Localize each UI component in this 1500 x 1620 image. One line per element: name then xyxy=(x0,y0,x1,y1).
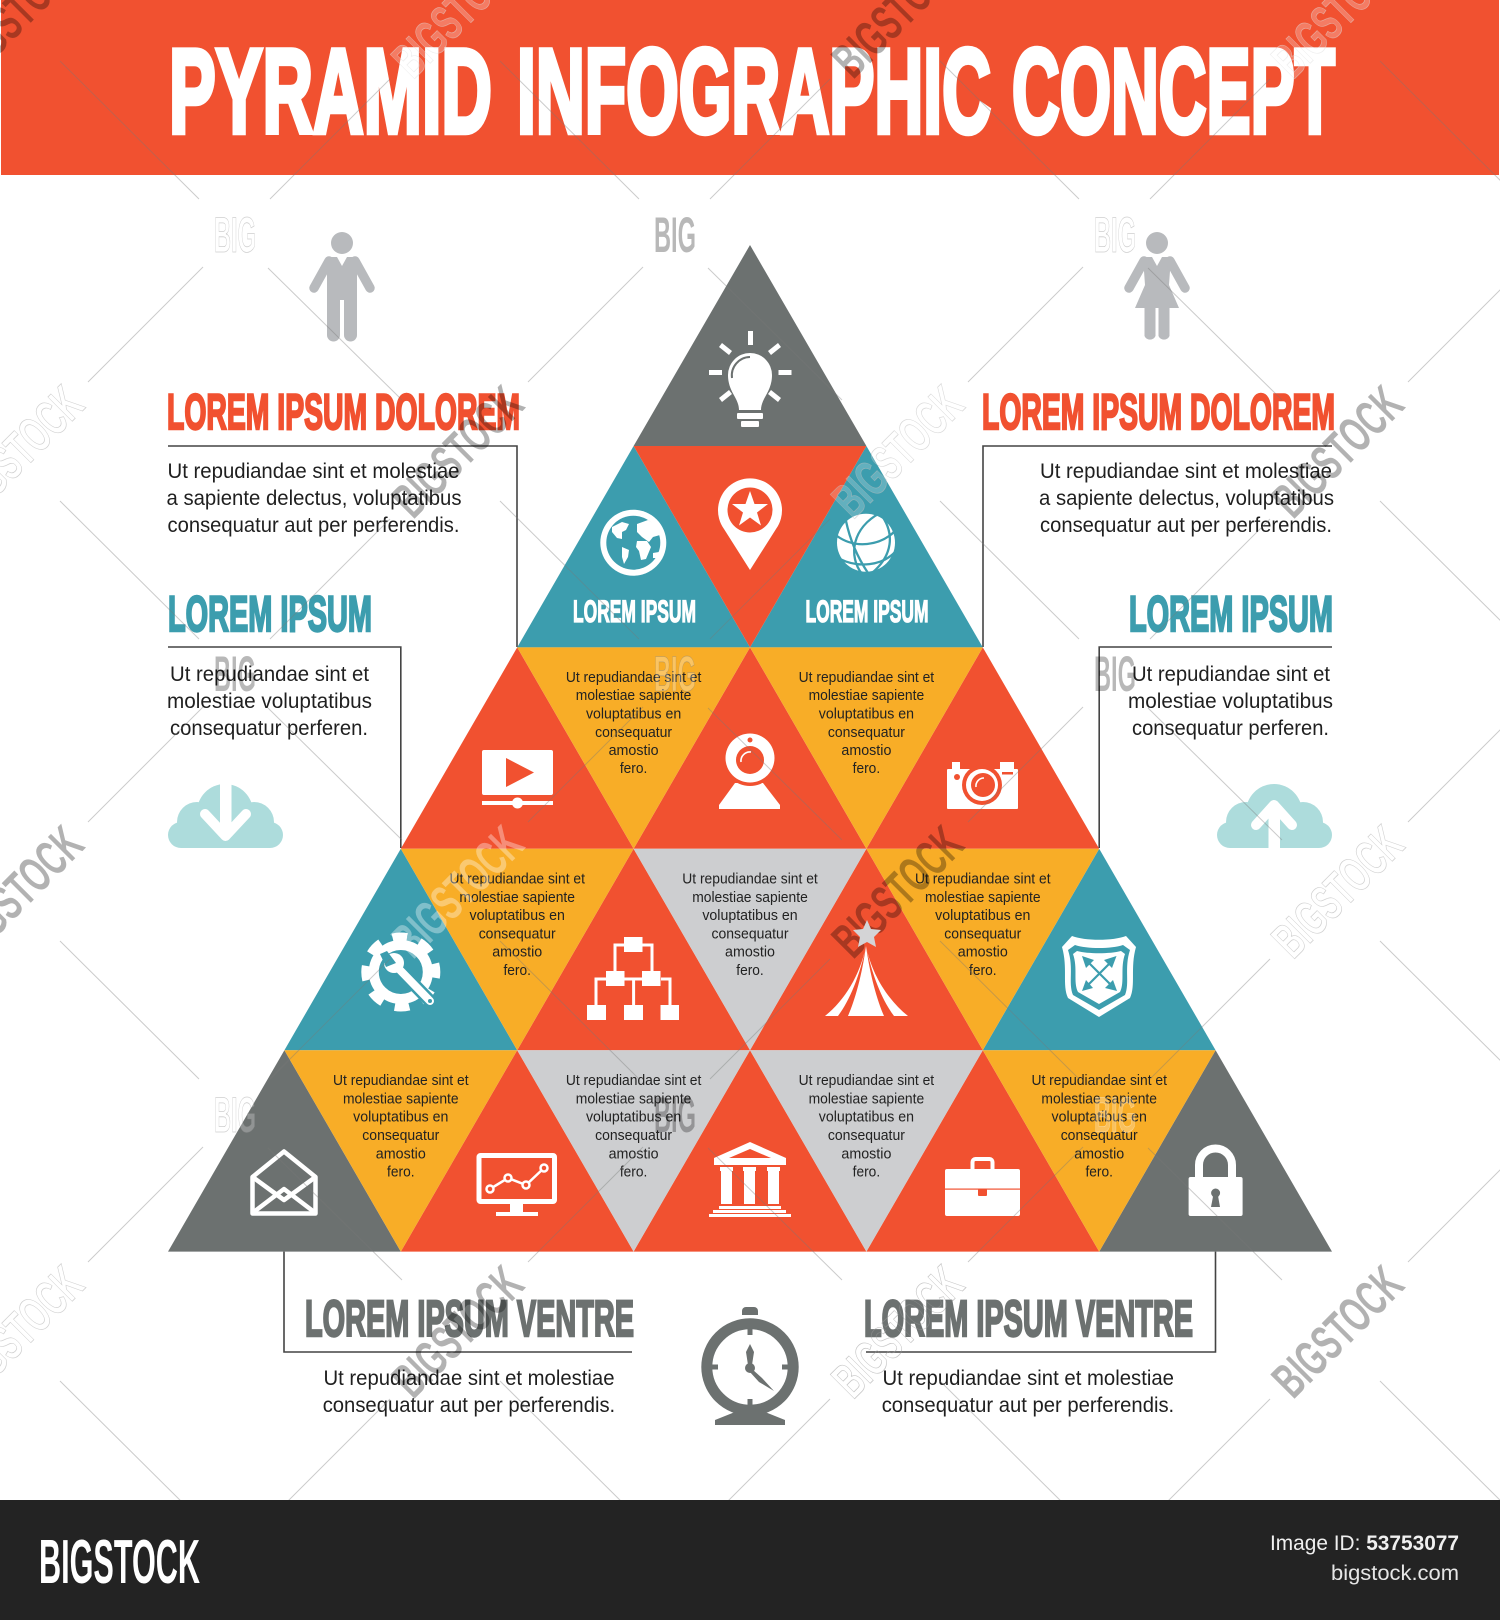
icon: gear with wrench xyxy=(358,930,443,1014)
triangle text: row 3 left: Ut repudiandae sint et xyxy=(566,670,701,686)
right middle heading: LOREM IPSUM xyxy=(1129,586,1333,642)
row 2 triangles xyxy=(517,446,983,647)
icon: wire globe xyxy=(837,513,895,574)
row 5 triangles xyxy=(168,1050,1332,1252)
triangle text: row 4 centre: fero. xyxy=(736,963,764,979)
triangle text: row 4 right: Ut repudiandae sint et xyxy=(915,872,1051,888)
triangle text: row 4 right: molestiae sapiente xyxy=(925,890,1041,906)
left top text: Ut repudiandae sint et molestiae xyxy=(168,460,460,483)
left top connector xyxy=(168,446,517,647)
watermark: BIG marks: BIG xyxy=(214,646,256,702)
left middle connector xyxy=(168,647,401,848)
triangle text: row 5 first: amostio xyxy=(376,1146,426,1162)
triangle text: row 3 left xyxy=(566,670,701,777)
bottom right text xyxy=(882,1367,1174,1417)
triangle text: row 5 third: amostio xyxy=(841,1146,891,1162)
triangle text: row 4 left: amostio xyxy=(492,945,542,961)
text: BIG xyxy=(1094,207,1136,263)
triangle text: row 5 fourth: molestiae sapiente xyxy=(1041,1091,1157,1107)
triangle text: row 4 left: Ut repudiandae sint et xyxy=(449,872,585,888)
watermark: BIG marks xyxy=(214,207,1136,1143)
icon: envelope xyxy=(252,1152,316,1214)
watermark: BIGSTOCK marks: BIGSTOCK xyxy=(821,375,974,528)
triangle text: row 3 right: amostio xyxy=(841,743,891,759)
title banner xyxy=(1,0,1499,175)
triangle text: row 5 second: Ut repudiandae sint et xyxy=(566,1073,701,1089)
icon: monitor chart xyxy=(479,1156,554,1216)
watermark: BIG marks: BIG xyxy=(654,646,696,702)
triangle text: row 4 centre: Ut repudiandae sint et xyxy=(682,872,818,888)
bottom left connector xyxy=(284,1252,632,1352)
triangle text: row 4 right: amostio xyxy=(958,945,1008,961)
triangle text: row 5 first: molestiae sapiente xyxy=(343,1091,459,1107)
row 4 triangles xyxy=(284,849,1216,1050)
triangle text: row 4 centre: amostio xyxy=(725,945,775,961)
triangle text: row 5 third: molestiae sapiente xyxy=(809,1091,924,1107)
triangle text: row 5 second: molestiae sapiente xyxy=(576,1091,691,1107)
footer bar xyxy=(0,1500,1500,1620)
bottom left text xyxy=(323,1367,615,1417)
triangle text: row 3 right xyxy=(799,670,934,777)
right top text xyxy=(1039,460,1334,537)
watermark: BIGSTOCK marks: BIGSTOCK xyxy=(1261,1255,1414,1408)
title xyxy=(169,24,1335,158)
watermark: BIGSTOCK marks: BIGSTOCK xyxy=(381,815,534,968)
triangle text: row 5 first: Ut repudiandae sint et xyxy=(333,1073,469,1089)
triangle text: row 3 left: consequatur xyxy=(595,725,672,741)
icon: map pin xyxy=(718,478,782,570)
triangle text: row 4 left: consequatur xyxy=(479,926,556,942)
triangle text: row 5 third xyxy=(799,1073,934,1181)
triangle text: row 4 right xyxy=(915,872,1051,979)
icon: light bulb xyxy=(709,331,792,427)
icon: cloud upload xyxy=(1217,784,1332,848)
triangle text: row 5 first: fero. xyxy=(387,1165,415,1181)
right middle text: molestiae voluptatibus xyxy=(1128,690,1333,713)
triangle text: row 5 second: amostio xyxy=(609,1146,659,1162)
left middle text: Ut repudiandae sint et xyxy=(170,663,369,686)
triangle text: row 3 right: voluptatibus en xyxy=(819,706,914,722)
bottom left text: consequatur aut per perferendis. xyxy=(323,1394,615,1417)
triangle text: row 4 centre: voluptatibus en xyxy=(702,908,798,924)
triangle text: row 5 first: consequatur xyxy=(362,1128,439,1144)
right middle connector xyxy=(1099,647,1332,848)
triangle text: row 5 second: voluptatibus en xyxy=(586,1110,681,1126)
triangle text: row 5 fourth: consequatur xyxy=(1061,1128,1138,1144)
row 1 triangle xyxy=(634,245,866,446)
bottom right connector xyxy=(866,1252,1216,1352)
triangle text: row 4 centre: consequatur xyxy=(712,926,789,942)
left top heading: LOREM IPSUM DOLOREM xyxy=(167,384,520,440)
triangle text: row 5 fourth xyxy=(1031,1073,1167,1181)
label: right: LOREM IPSUM xyxy=(806,593,928,629)
triangle text: row 3 left: voluptatibus en xyxy=(586,706,681,722)
pyramid xyxy=(168,245,1332,1252)
triangle text: row 4 right: consequatur xyxy=(944,926,1021,942)
icon: woman xyxy=(1129,232,1185,340)
triangle text: row 3 right: fero. xyxy=(853,761,880,777)
triangle text: row 4 right: fero. xyxy=(969,963,997,979)
left middle text: molestiae voluptatibus xyxy=(167,690,372,713)
icon: cloud download xyxy=(168,784,283,848)
triangle text: row 5 fourth: fero. xyxy=(1085,1165,1113,1181)
triangle text: row 3 right: molestiae sapiente xyxy=(809,688,924,704)
watermark: BIGSTOCK marks: BIGSTOCK xyxy=(381,375,534,528)
triangle text: row 3 left: amostio xyxy=(609,743,659,759)
triangle text: row 4 left: voluptatibus en xyxy=(470,908,565,924)
icon: briefcase xyxy=(945,1159,1020,1216)
right top text: Ut repudiandae sint et molestiae xyxy=(1040,460,1332,483)
icon: video player xyxy=(482,750,553,808)
footer image id: Image ID: 53753077 xyxy=(1270,1532,1459,1555)
icon: shield with arrows xyxy=(1062,936,1136,1017)
right middle text: Ut repudiandae sint et xyxy=(1132,663,1330,686)
left middle heading: LOREM IPSUM xyxy=(168,586,372,642)
left top text: a sapiente delectus, voluptatibus xyxy=(166,487,462,510)
triangle text: row 5 third: Ut repudiandae sint et xyxy=(799,1073,934,1089)
icon: circus tent xyxy=(825,946,908,1016)
triangle text: row 3 left: fero. xyxy=(620,761,647,777)
icon: padlock xyxy=(1189,1148,1243,1216)
triangle text: row 5 first: voluptatibus en xyxy=(353,1110,448,1126)
title: PYRAMID xyxy=(169,24,492,158)
watermark: BIGSTOCK marks: BIGSTOCK xyxy=(1261,815,1414,968)
footer site: bigstock.com xyxy=(1331,1562,1459,1585)
bottom left text: Ut repudiandae sint et molestiae xyxy=(324,1367,614,1390)
triangle text: row 5 third: consequatur xyxy=(828,1128,905,1144)
title: INFOGRAPHIC xyxy=(517,24,991,158)
right top connector xyxy=(983,446,1332,647)
icon: clock xyxy=(707,1307,793,1425)
footer bar: BIGSTOCK xyxy=(39,1528,200,1597)
icon: world globe xyxy=(600,510,666,576)
watermark: BIGSTOCK marks: BIGSTOCK xyxy=(821,815,974,968)
right middle text: consequatur perferen. xyxy=(1132,717,1329,740)
row 3 triangles xyxy=(401,647,1099,849)
left top text: consequatur aut per perferendis. xyxy=(168,514,460,537)
bottom left heading: LOREM IPSUM VENTRE xyxy=(305,1290,634,1347)
left middle text: consequatur perferen. xyxy=(170,717,368,740)
triangle text: row 3 right: consequatur xyxy=(828,725,905,741)
triangle text: row 3 left: molestiae sapiente xyxy=(576,688,691,704)
watermark: BIGSTOCK marks: BIGSTOCK xyxy=(821,1255,974,1408)
triangle text: row 5 third: voluptatibus en xyxy=(819,1110,914,1126)
left middle text xyxy=(167,663,372,740)
triangle text: row 5 third: fero. xyxy=(853,1165,880,1181)
text: BIG xyxy=(1094,646,1136,702)
triangle text: row 5 fourth: amostio xyxy=(1074,1146,1124,1162)
icon: temple xyxy=(709,1142,791,1217)
watermark: BIG marks: BIG xyxy=(654,207,696,263)
triangle text: row 3 right: Ut repudiandae sint et xyxy=(799,670,934,686)
right top text: a sapiente delectus, voluptatibus xyxy=(1039,487,1334,510)
watermark: BIGSTOCK marks: BIGSTOCK xyxy=(381,1255,534,1408)
text: BIG xyxy=(1094,1087,1136,1143)
triangle text: row 4 centre: molestiae sapiente xyxy=(692,890,808,906)
triangle text: row 4 centre xyxy=(682,872,818,979)
bottom right text: Ut repudiandae sint et molestiae xyxy=(882,1367,1174,1390)
bottom right heading: LOREM IPSUM VENTRE xyxy=(864,1290,1193,1347)
triangle text: row 5 first xyxy=(333,1073,469,1181)
icon: tent star xyxy=(853,920,881,947)
right top text: consequatur aut per perferendis. xyxy=(1040,514,1332,537)
triangle text: row 5 fourth: Ut repudiandae sint et xyxy=(1031,1073,1167,1089)
right middle text xyxy=(1128,663,1333,740)
watermark: BIGSTOCK marks: BIGSTOCK xyxy=(1261,375,1414,528)
icon: webcam xyxy=(719,732,780,809)
triangle text: row 5 fourth: voluptatibus en xyxy=(1052,1110,1147,1126)
left top text xyxy=(166,460,462,537)
watermark: BIG marks: BIG xyxy=(214,1087,256,1143)
icon: org chart xyxy=(587,937,679,1020)
triangle text: row 5 second: consequatur xyxy=(595,1128,672,1144)
bottom right text: consequatur aut per perferendis. xyxy=(882,1394,1174,1417)
watermark: BIG marks: BIG xyxy=(654,1087,696,1143)
watermark: BIG marks: BIG xyxy=(214,207,256,263)
triangle text: row 4 left xyxy=(449,872,585,979)
triangle text: row 4 left: fero. xyxy=(503,963,531,979)
label: left: LOREM IPSUM xyxy=(573,593,696,629)
icon: camera xyxy=(947,762,1018,809)
triangle text: row 5 second xyxy=(566,1073,701,1181)
triangle text: row 5 second: fero. xyxy=(620,1165,647,1181)
triangle text: row 4 left: molestiae sapiente xyxy=(459,890,575,906)
icon: man xyxy=(314,232,370,342)
triangle text: row 4 right: voluptatibus en xyxy=(935,908,1030,924)
